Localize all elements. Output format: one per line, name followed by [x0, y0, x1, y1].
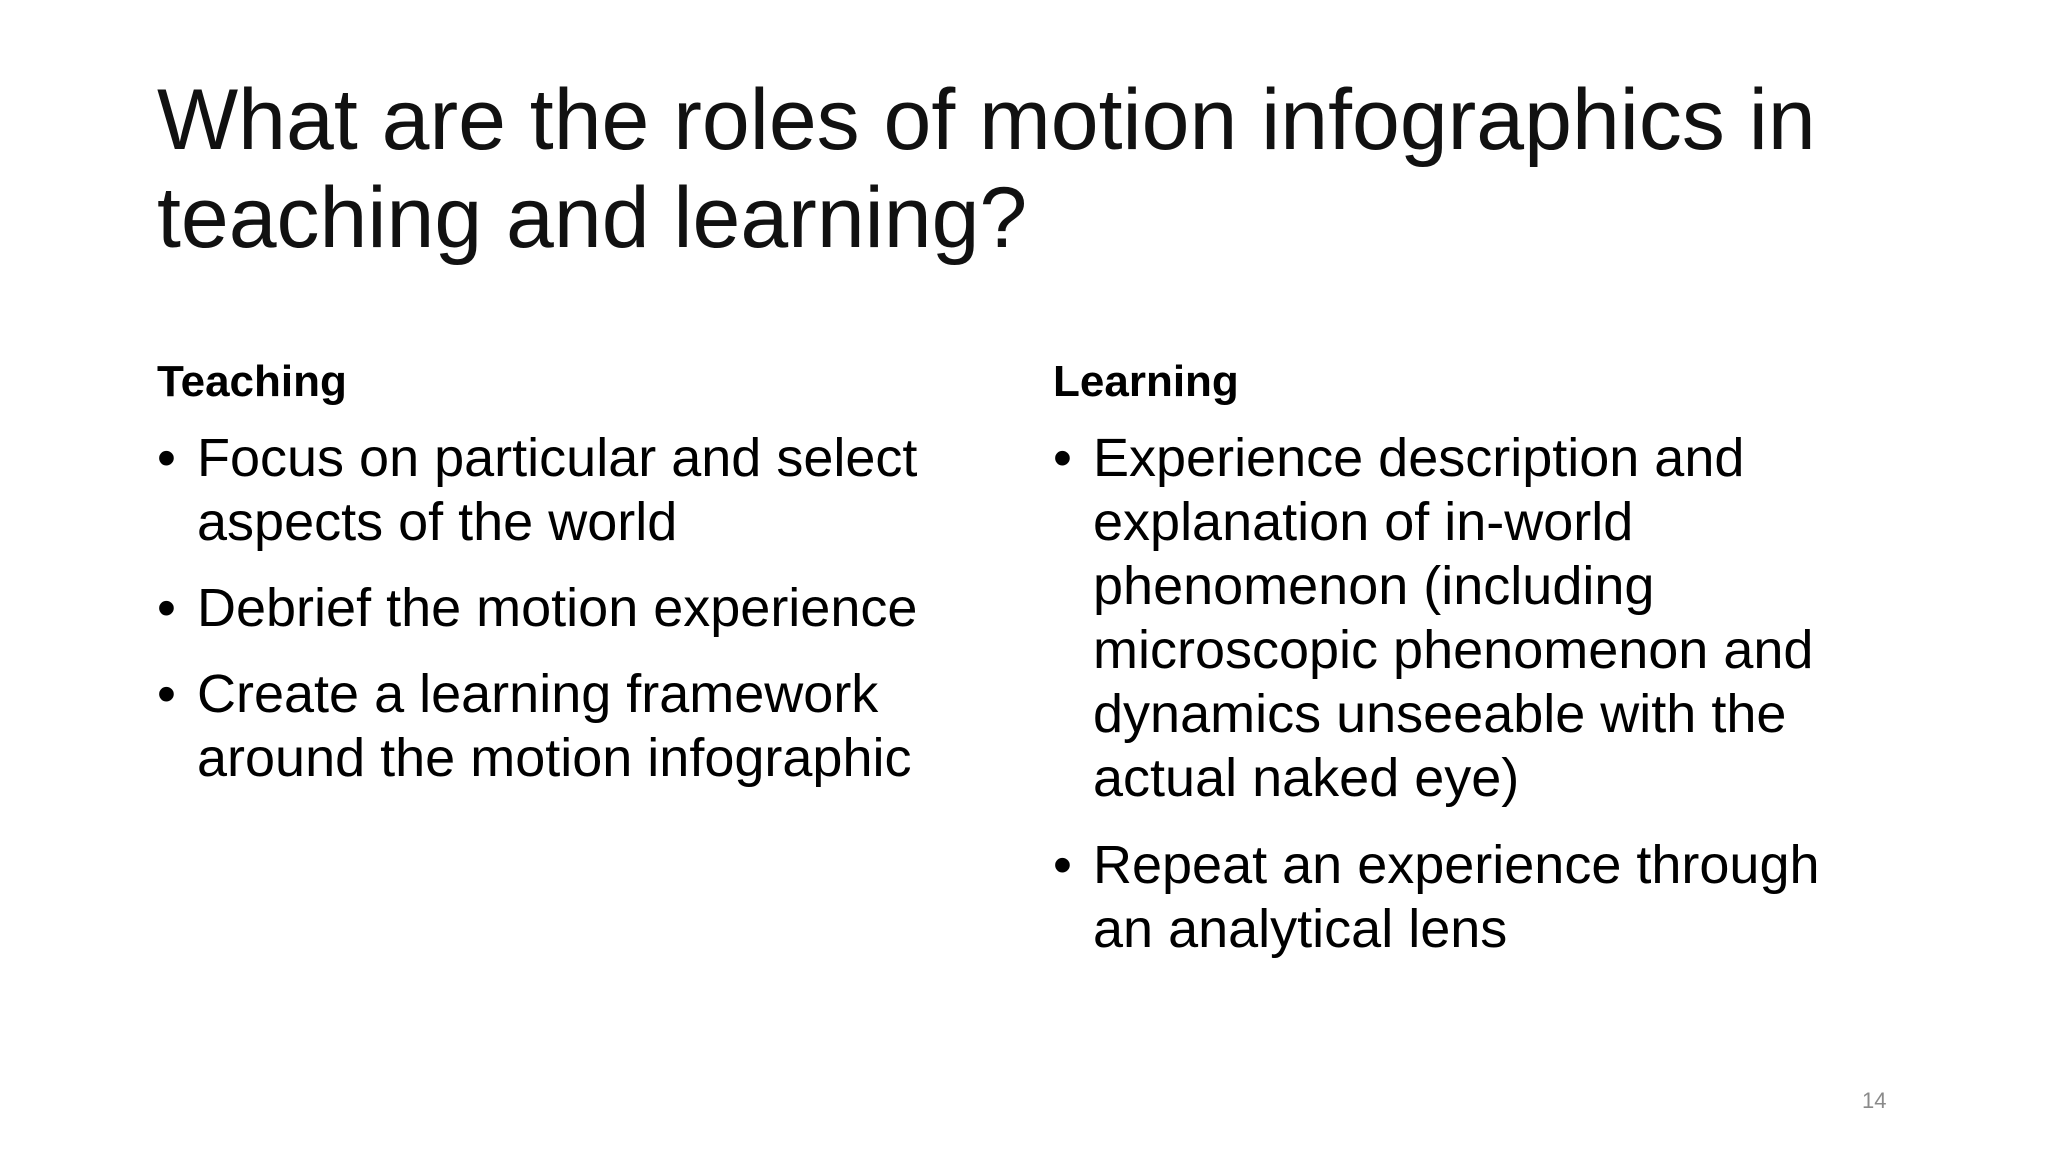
bullet: focus: Focus on particular and select: [197, 428, 917, 488]
bullet: experience description: explanation of in-world: [1093, 492, 1633, 552]
bullet: framework: [157, 664, 911, 788]
bullet: repeat: an analytical lens: [1093, 899, 1507, 959]
bullet: experience description: phenomenon (including: [1093, 556, 1654, 616]
bullet: framework: Create a learning framework: [197, 664, 878, 724]
bullet: framework: around the motion infographic: [197, 728, 911, 788]
heading: learning: Learning: [1053, 357, 1239, 406]
bullet: experience description: microscopic phenomenon and: [1093, 620, 1813, 680]
title: What are the roles of motion infographics in: [157, 72, 1816, 168]
title: [157, 72, 1816, 266]
bullet: debrief: Debrief the motion experience: [197, 578, 917, 638]
bullet: focus: [157, 428, 917, 552]
bullet: experience description: actual naked eye): [1093, 748, 1519, 808]
title: teaching and learning?: [157, 170, 1027, 266]
bullet: debrief: •: [157, 578, 176, 638]
bullet: framework: •: [157, 664, 176, 724]
bullet: focus: aspects of the world: [197, 492, 677, 552]
bullet: repeat: Repeat an experience through: [1093, 835, 1820, 895]
bullet: experience description: [1053, 428, 1813, 808]
bullet: experience description: •: [1053, 428, 1072, 488]
panel: learning: [1053, 357, 1820, 959]
panel: teaching: [157, 357, 917, 788]
bullet: focus: •: [157, 428, 176, 488]
bullet: repeat: •: [1053, 835, 1072, 895]
bullet: repeat: [1053, 835, 1820, 959]
heading: teaching: Teaching: [157, 357, 347, 406]
bullet: experience description: Experience description and: [1093, 428, 1744, 488]
bullet: experience description: dynamics unseeable with the: [1093, 684, 1786, 744]
page number: 14: [1862, 1088, 1886, 1113]
